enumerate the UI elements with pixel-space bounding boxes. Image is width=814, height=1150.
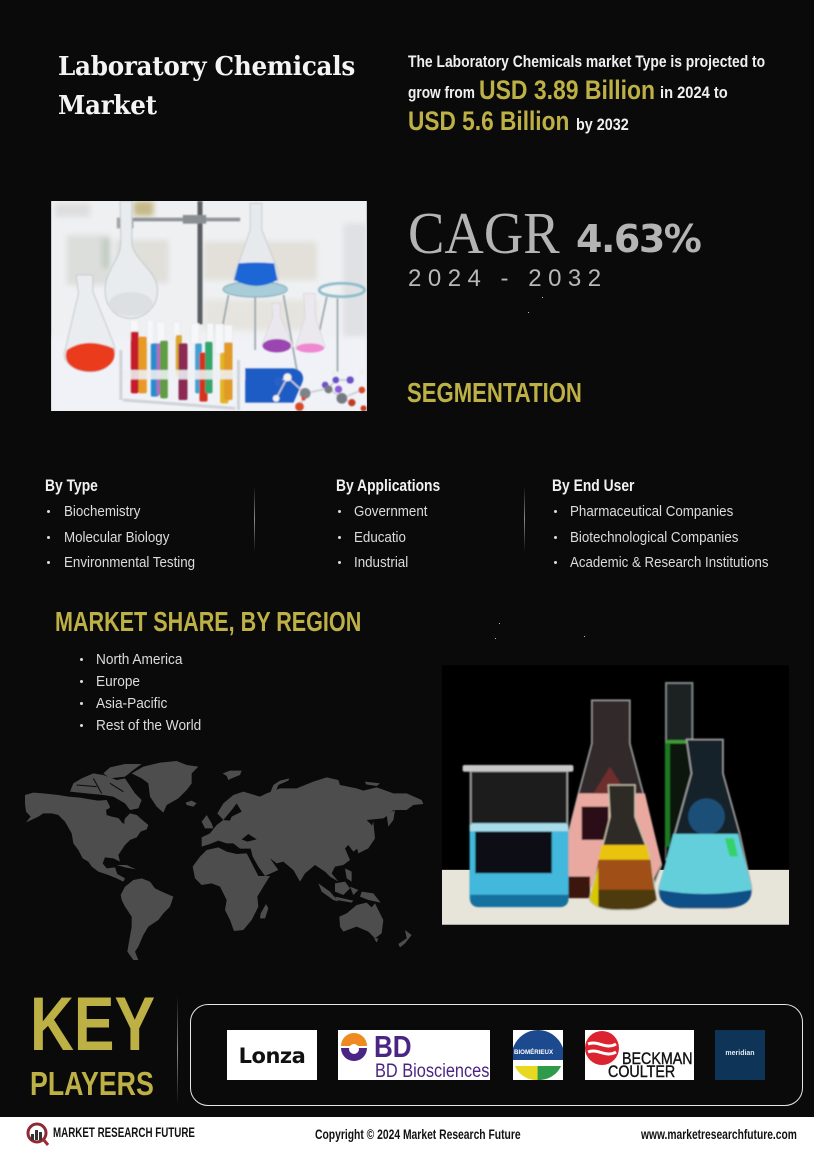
red flask	[64, 275, 115, 372]
segment: by applications: By Applications	[336, 477, 440, 495]
logo: Meridian	[715, 1030, 765, 1080]
CAGR figure	[408, 200, 701, 266]
title: Market	[58, 90, 157, 120]
segment: by applications	[336, 477, 440, 571]
segment: by end user: Biotechnological Companies	[570, 529, 738, 546]
market projection text: in 2024 to	[660, 84, 728, 102]
region list: Asia-Pacific	[96, 695, 167, 712]
segment: by end user: By End User	[552, 477, 634, 495]
yellow flask	[589, 785, 657, 910]
glass tubes	[130, 320, 232, 354]
market projection text: USD 5.6 Billion	[408, 106, 569, 136]
segment: by applications: Government	[354, 503, 427, 520]
logo: Lonza	[227, 1030, 317, 1080]
region list: North America	[96, 651, 182, 668]
title	[58, 51, 355, 120]
CAGR period: 2024 - 2032	[408, 265, 608, 292]
market projection text	[408, 53, 765, 136]
molecule model	[276, 377, 362, 407]
segment: by type: By Type	[45, 477, 98, 495]
segment: by end user: Pharmaceutical Companies	[570, 503, 733, 520]
key players heading: KEY	[30, 982, 155, 1067]
segment: by type	[45, 477, 195, 571]
segment: by type: Molecular Biology	[64, 529, 169, 546]
ring stands	[222, 295, 338, 372]
market projection text: by 2032	[576, 116, 629, 134]
region list: Europe	[96, 673, 140, 690]
logo: BD Biosciences: BD	[374, 1030, 412, 1064]
key players heading: PLAYERS	[30, 1065, 154, 1102]
round flask	[105, 201, 158, 318]
copyright: Copyright © 2024 Market Research Future	[315, 1127, 521, 1142]
segment: by type: Biochemistry	[64, 503, 140, 520]
footer brand: MARKET RESEARCH FUTURE	[53, 1125, 195, 1140]
pink flask	[295, 293, 325, 352]
market projection text: USD 3.89 Billion	[479, 75, 655, 105]
region list	[80, 651, 201, 734]
blue flask	[234, 203, 278, 292]
icon: market research future logo	[26, 1122, 50, 1146]
logo: Meridian: meridian	[725, 1050, 755, 1057]
market projection text: The Laboratory Chemicals market Type is projected to	[408, 53, 765, 71]
logo: bioMerieux	[513, 1030, 563, 1080]
logo: Lonza: Lonza	[239, 1044, 305, 1068]
website: www.marketresearchfuture.com	[641, 1127, 797, 1142]
title: Laboratory Chemicals	[58, 51, 355, 82]
segment: by applications: Industrial	[354, 554, 408, 571]
logo: bioMerieux: BIOMÉRIEUX	[514, 1049, 553, 1056]
purple flask	[262, 303, 294, 350]
right flask	[659, 739, 752, 908]
photo: beakers with coloured liquids	[442, 666, 789, 925]
pink flask	[568, 700, 662, 893]
CAGR figure: CAGR	[408, 200, 560, 266]
world map	[25, 761, 424, 960]
market projection text: grow from	[408, 84, 475, 102]
region list: Rest of the World	[96, 717, 201, 734]
footer bar	[0, 1117, 814, 1150]
tube rack	[120, 370, 245, 379]
market share heading: MARKET SHARE, BY REGION	[55, 606, 361, 637]
logo: Beckman Coulter	[585, 1030, 694, 1080]
graduated cylinder	[666, 683, 693, 860]
blue box	[245, 368, 303, 403]
beaker	[470, 772, 568, 906]
photo: laboratory glassware on bench	[51, 201, 367, 411]
segment: by type: Environmental Testing	[64, 554, 195, 571]
segment: by applications: Educatio	[354, 529, 406, 546]
segmentation heading: SEGMENTATION	[407, 377, 582, 408]
logo: Beckman Coulter: BECKMAN	[622, 1049, 693, 1068]
segment: by end user	[552, 477, 768, 571]
logo: BD Biosciences	[338, 1030, 490, 1080]
CAGR figure: 4.63%	[576, 217, 700, 261]
stand	[198, 201, 202, 324]
segment: by end user: Academic & Research Institutions	[570, 554, 768, 571]
key players panel	[190, 1004, 803, 1106]
